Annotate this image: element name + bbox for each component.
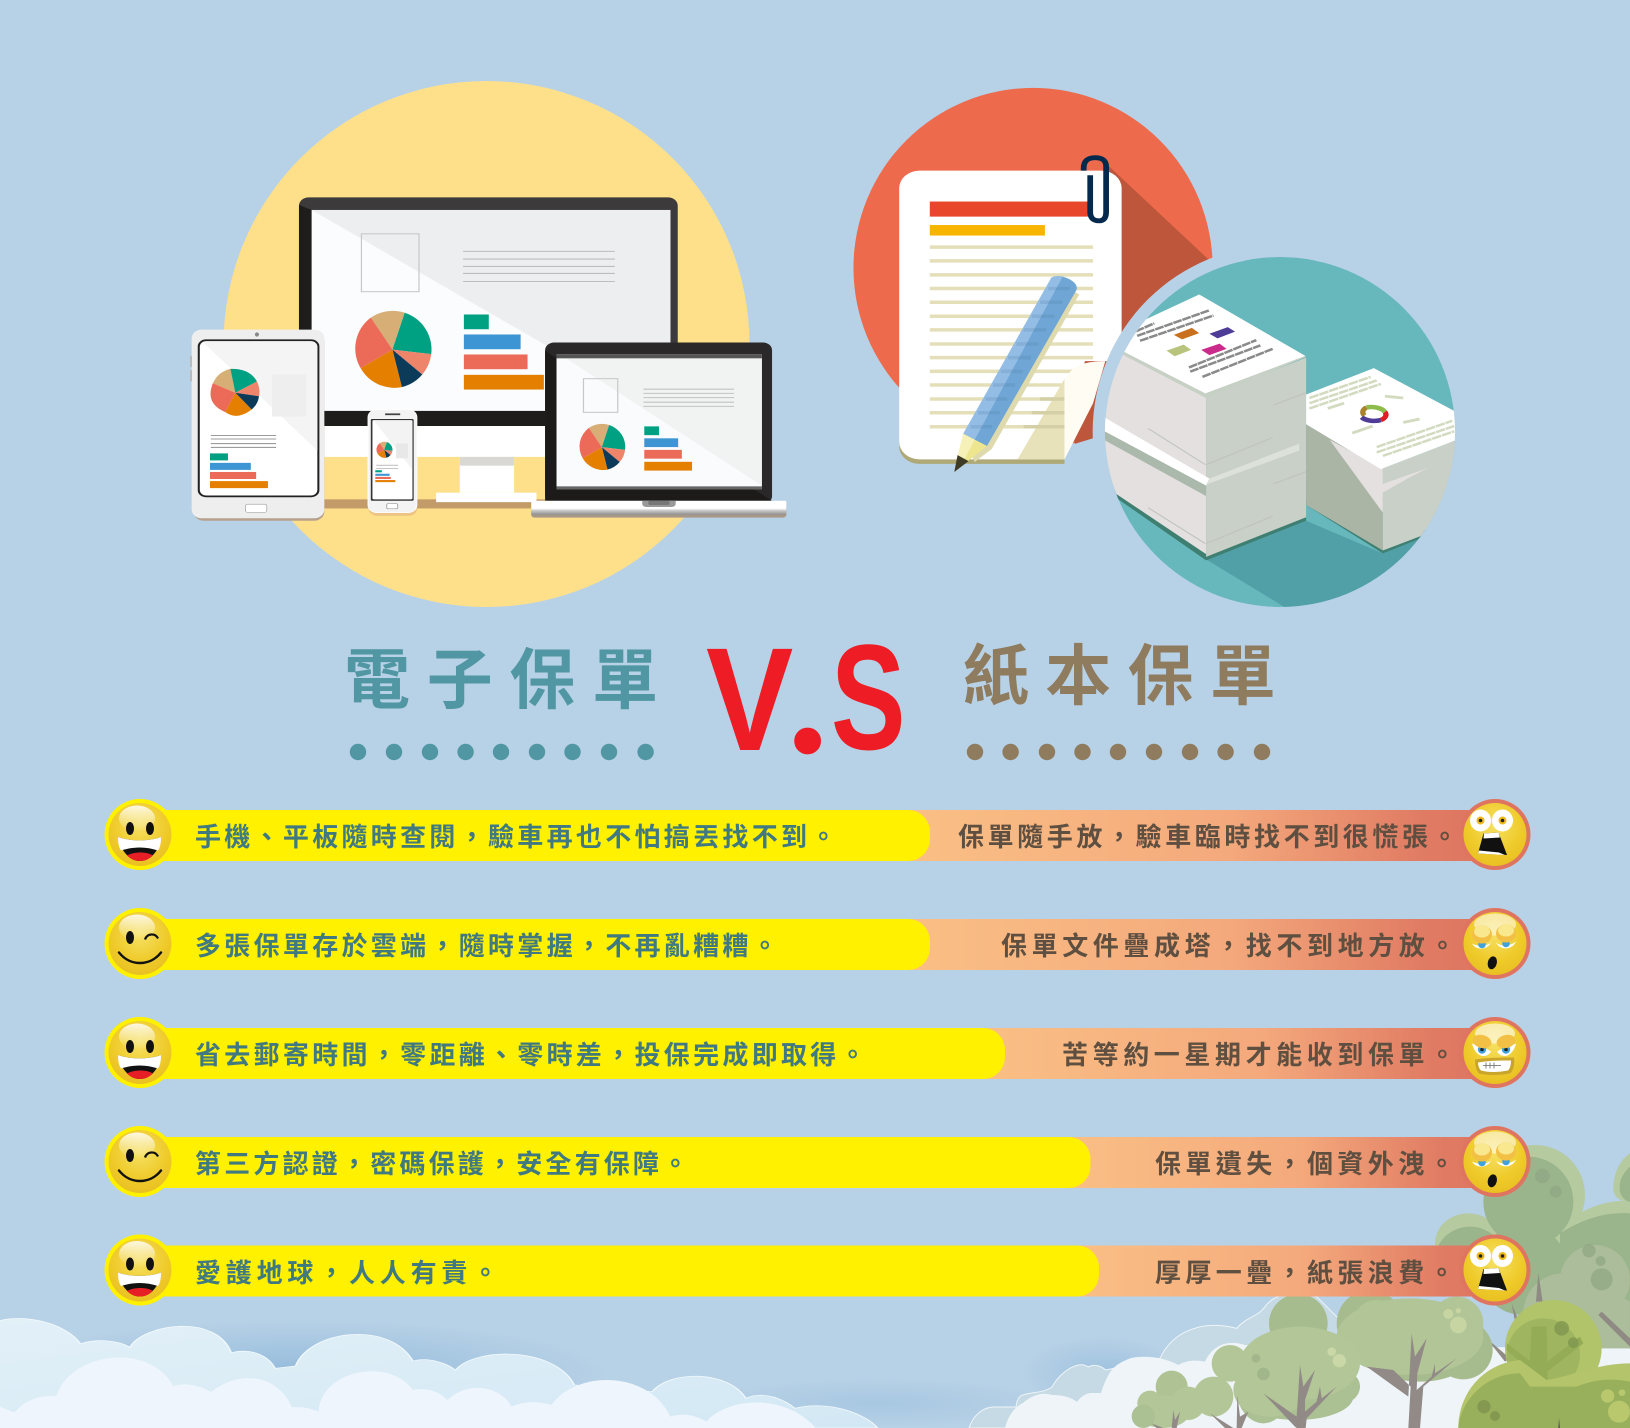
heading: V.S: S bbox=[831, 614, 906, 782]
heading: V.S: V bbox=[706, 618, 793, 782]
icon: angry face bbox=[1460, 1017, 1530, 1088]
icon: happy face bbox=[104, 1234, 176, 1306]
heading: V.S bbox=[706, 605, 906, 788]
digital bar 2 bbox=[140, 919, 930, 970]
text: paper drawback 3: 苦等約一星期才能收到保單。 bbox=[1062, 1040, 1460, 1070]
icon: smartphone bbox=[368, 410, 417, 516]
paper bar 2 bbox=[900, 919, 1495, 970]
text: paper drawback 4: 保單遺失，個資外洩。 bbox=[1155, 1149, 1459, 1179]
row 1 bbox=[104, 799, 1530, 870]
red circle bbox=[853, 88, 1213, 448]
panel: clouds and trees right bbox=[969, 1145, 1630, 1428]
dots: electronic bbox=[350, 744, 654, 760]
icon: scream face bbox=[1460, 799, 1530, 870]
digital bar 5 bbox=[140, 1246, 1099, 1296]
row 3 bbox=[104, 1017, 1530, 1088]
icon: large paper stack bbox=[1101, 294, 1306, 560]
tree: medium bbox=[1269, 1290, 1493, 1428]
sun circle bbox=[224, 81, 750, 607]
digital bar 3 bbox=[140, 1028, 1005, 1079]
tree: front olive bbox=[1458, 1300, 1630, 1428]
icon: wink face bbox=[104, 908, 176, 979]
icon: scream face bbox=[1460, 1234, 1530, 1306]
teal circle with paper stacks bbox=[1101, 257, 1456, 607]
icon: happy face bbox=[104, 1017, 176, 1088]
panel: paper policy illustration bbox=[853, 88, 1467, 619]
heading: electronic policy: 電子保單 bbox=[344, 643, 675, 717]
panel: clouds left bbox=[0, 1318, 1182, 1428]
paper bar 3 bbox=[975, 1028, 1495, 1079]
text: digital benefit 5: 愛護地球，人人有責。 bbox=[195, 1258, 503, 1288]
dots: paper bbox=[967, 744, 1270, 760]
heading: V.S: . bbox=[787, 605, 828, 788]
blue ring bbox=[1093, 245, 1467, 619]
paper bar 5 bbox=[1070, 1246, 1495, 1296]
icon: tablet bbox=[190, 330, 324, 521]
text: paper drawback 2: 保單文件疊成塔，找不到地方放。 bbox=[1001, 931, 1460, 961]
text: digital benefit 2: 多張保單存於雲端，隨時掌握，不再亂糟糟。 bbox=[195, 931, 781, 961]
row 2 bbox=[104, 908, 1530, 979]
tree: smallest bbox=[1132, 1371, 1205, 1428]
long shadow bbox=[1069, 165, 1212, 444]
icon: tired face bbox=[1460, 908, 1530, 979]
icon: tired face bbox=[1460, 1126, 1530, 1197]
tree: small bbox=[1193, 1327, 1360, 1428]
icon: laptop bbox=[531, 343, 786, 518]
icon: small paper stack bbox=[1306, 368, 1456, 553]
digital bar 1 bbox=[140, 810, 930, 861]
icon: wink face bbox=[104, 1126, 176, 1197]
row 4 bbox=[104, 1126, 1530, 1197]
digital bar 4 bbox=[140, 1137, 1090, 1188]
panel: electronic policy illustration bbox=[190, 81, 786, 607]
heading: paper policy: 紙本保單 bbox=[963, 639, 1292, 713]
text: digital benefit 4: 第三方認證，密碼保護，安全有保障。 bbox=[195, 1149, 691, 1179]
paper bar 4 bbox=[1060, 1137, 1495, 1188]
icon: desktop monitor bbox=[299, 197, 678, 508]
text: paper drawback 1: 保單隨手放，驗車臨時找不到很慌張。 bbox=[958, 822, 1461, 852]
icon: happy face bbox=[104, 799, 176, 870]
text: digital benefit 3: 省去郵寄時間，零距離、零時差，投保完成即取得。 bbox=[195, 1040, 869, 1070]
icon: document bbox=[899, 158, 1122, 472]
paper bar 1 bbox=[900, 810, 1495, 861]
tree: back large bbox=[1435, 1145, 1630, 1362]
text: digital benefit 1: 手機、平板隨時查閱，驗車再也不怕搞丟找不到。 bbox=[195, 822, 840, 852]
row 5 bbox=[104, 1234, 1530, 1306]
text: paper drawback 5: 厚厚一疊，紙張浪費。 bbox=[1155, 1258, 1459, 1288]
devices bbox=[190, 197, 786, 521]
clouds right bbox=[969, 1294, 1630, 1428]
